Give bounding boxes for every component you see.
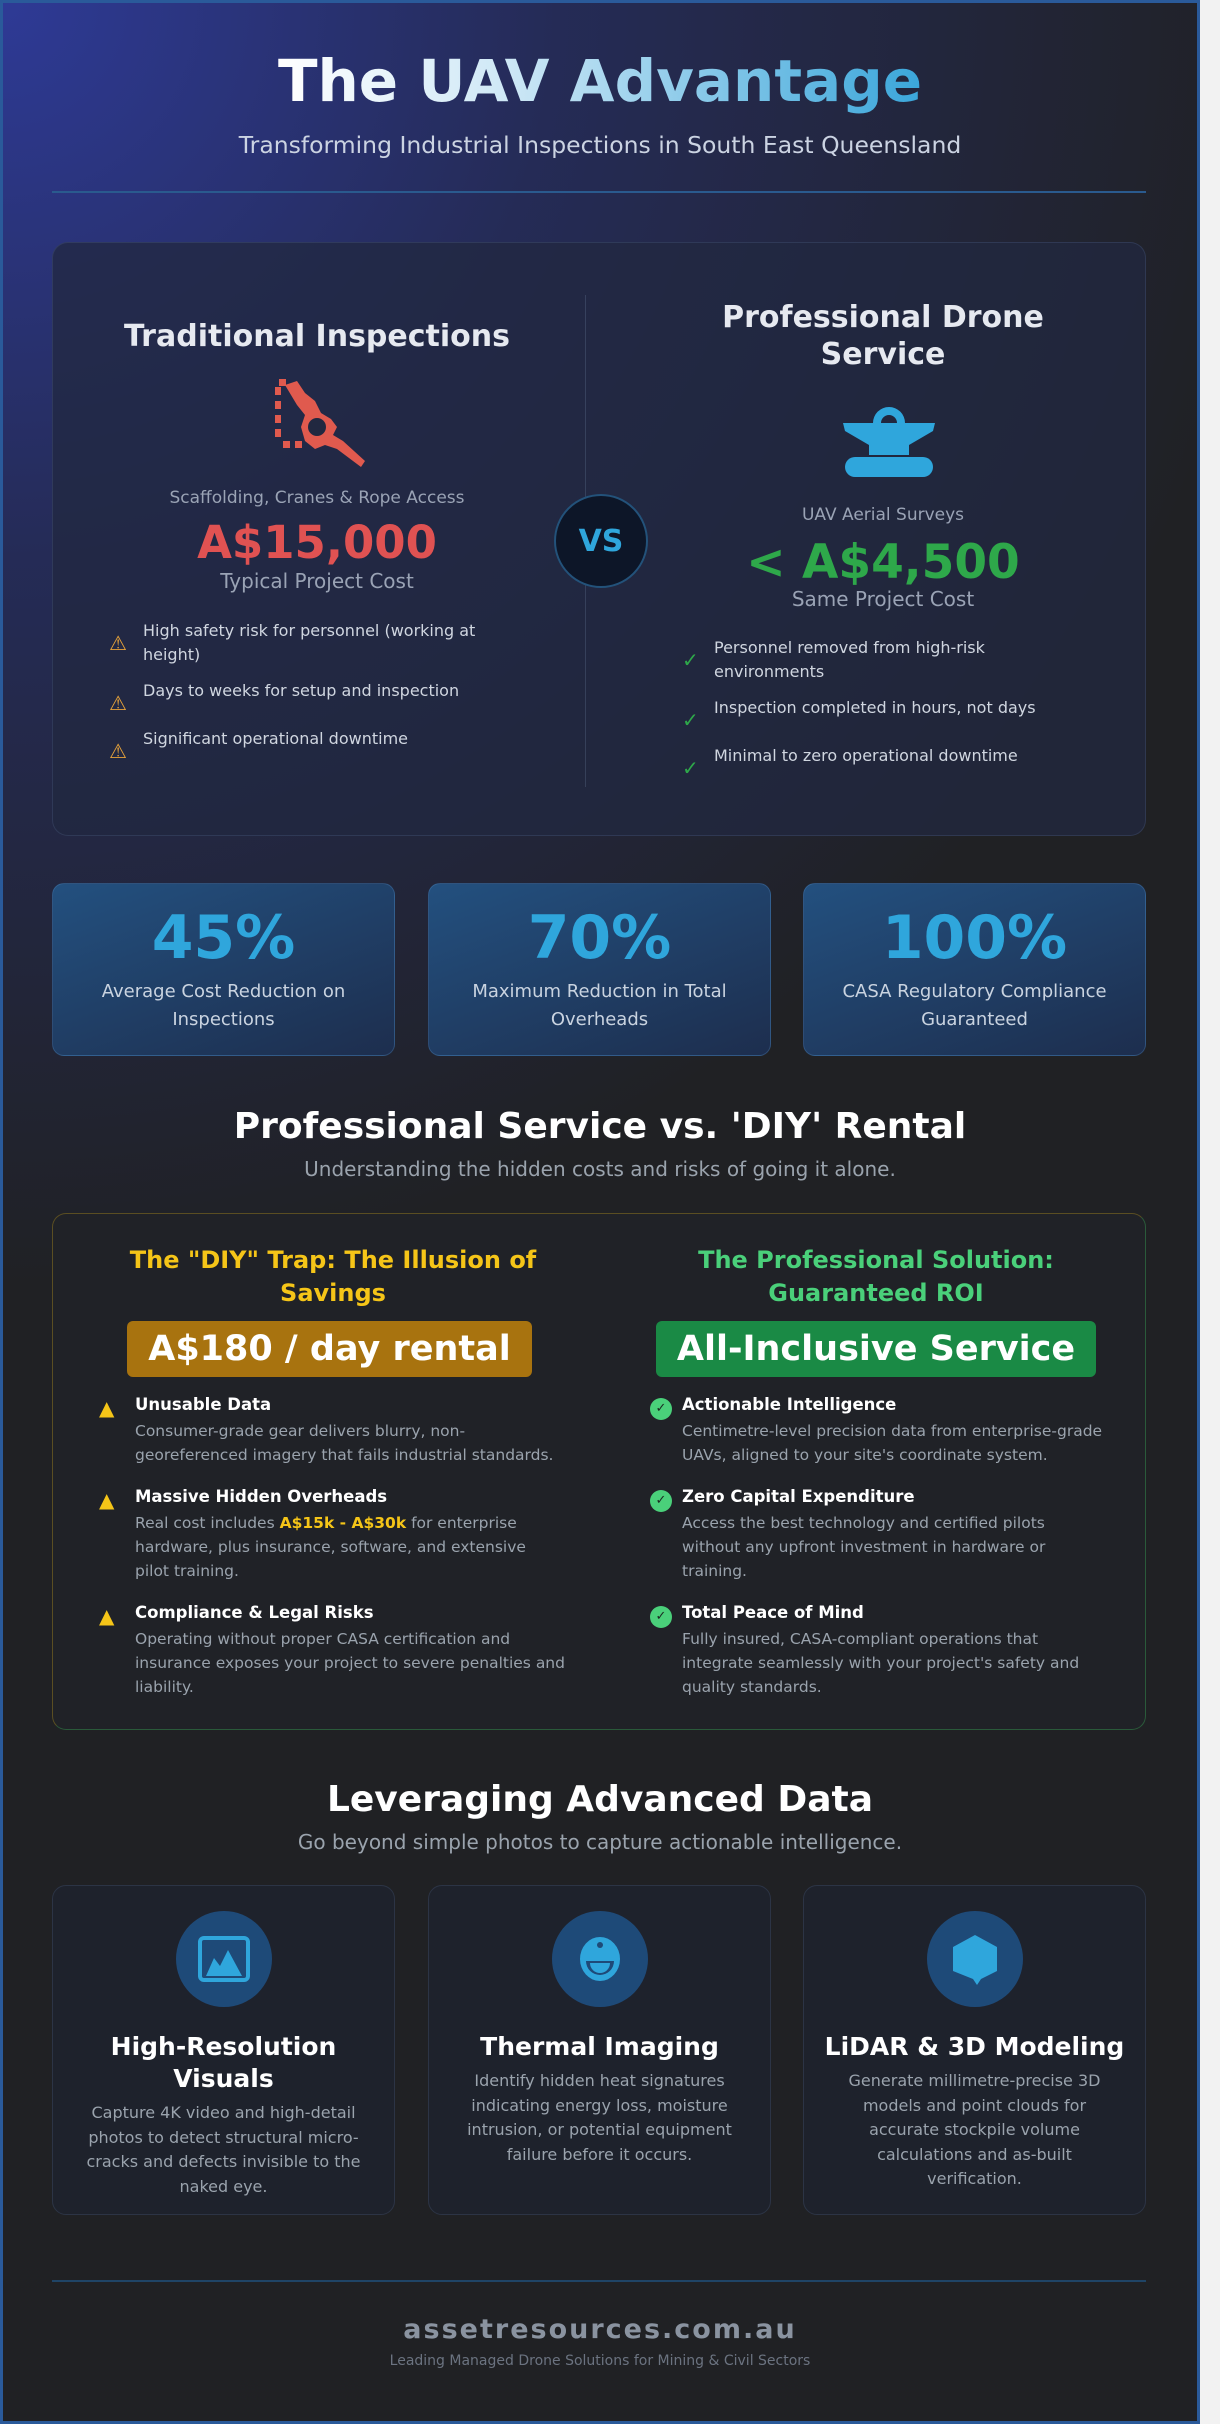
VS badge: VS [579, 524, 623, 558]
stat: 70%: Maximum Reduction in Total [472, 981, 727, 1002]
badge: rental [127, 1321, 532, 1377]
list: DIY risks [99, 1395, 553, 1464]
heading: professional solution: The Professional Solution: [698, 1246, 1054, 1274]
icon: 3d hexagon [926, 1911, 1022, 2007]
panel: DIY vs professional: ✓ [656, 1493, 666, 1508]
icon: scaffolding [275, 379, 365, 467]
panel: DIY vs professional: ▲ [99, 1396, 114, 1420]
card: high-res: Capture 4K video and high-detail photos to detect structural micro-cracks and defects invisible to the naked eye. [86, 2103, 361, 2196]
title: The UAV Advantage [278, 47, 922, 115]
list: traditional risks: ⚠ [109, 739, 127, 763]
text: Go beyond simple photos to capture actionable intelligence. [298, 1830, 902, 1854]
panel: DIY vs professional: ✓ [656, 1609, 666, 1624]
heading: professional solution: Guaranteed ROI [768, 1279, 984, 1307]
text: Understanding the hidden costs and risks of going it alone. [304, 1157, 896, 1181]
list: DIY risks: Consumer-grade gear delivers blurry, non-georeferenced imagery that fails industrial standards. [135, 1422, 553, 1464]
list: drone benefits: ✓ [682, 708, 699, 732]
stat: 100%: CASA Regulatory Compliance [842, 981, 1107, 1002]
panel: comparison: Same Project Cost [792, 587, 974, 611]
panel: DIY vs professional: Compliance & Legal Risks [135, 1603, 374, 1622]
footer: tagline: Leading Managed Drone Solutions for Mining & Civil Sectors [390, 2353, 810, 2369]
list: professional benefits: Centimetre-level precision data from enterprise-grade UAVs, aligned to your site's coordinate system. [682, 1422, 1102, 1464]
stat: 45%: Inspections [172, 1009, 275, 1030]
stat: 70% [428, 883, 771, 1056]
badge: all-inclusive: All-Inclusive Service [677, 1329, 1075, 1369]
panel: DIY vs professional: Operating without proper CASA certification and insurance exposes your project to severe penalties and liability. [135, 1630, 565, 1696]
list: professional benefits [650, 1395, 1102, 1464]
panel: DIY vs professional: Access the best technology and certified pilots without any upfront investment in hardware or training. [682, 1514, 1045, 1580]
subtitle: Transforming Industrial Inspections in South East Queensland [239, 131, 961, 159]
panel: DIY vs professional: ✓ [656, 1401, 666, 1416]
panel: comparison: Typical Project Cost [220, 569, 414, 593]
list: drone benefits: Inspection completed in hours, not days [714, 698, 1036, 717]
card: lidar: LiDAR & 3D Modeling [825, 2032, 1124, 2061]
card: high-res [52, 1885, 395, 2215]
panel: DIY vs professional: Total Peace of Mind [682, 1603, 864, 1622]
icon: thermal [552, 1911, 648, 2007]
panel: DIY vs professional: Real cost includes A$15k - A$30k for enterprise hardware, plus insurance, software, and extensive pilot training. [135, 1514, 526, 1580]
stat: 45%: 45% [152, 903, 295, 973]
badge: rental: A$180 / day rental [148, 1329, 511, 1369]
list: DIY risks: Unusable Data [135, 1395, 271, 1414]
card: thermal [428, 1885, 771, 2215]
card: thermal: Identify hidden heat signatures indicating energy loss, moisture intrusion, or potential equipment failure before it occurs. [467, 2071, 732, 2164]
price: traditional: A$15,000 [197, 516, 437, 569]
heading: traditional: Traditional Inspections [124, 319, 510, 354]
footer: website: assetresources.com.au [403, 2314, 797, 2345]
price: drone: < A$4,500 [746, 535, 1020, 590]
stat: 100%: 100% [882, 903, 1067, 973]
badge: all-inclusive [656, 1321, 1096, 1377]
list: traditional risks [109, 621, 475, 763]
panel: comparison: UAV Aerial Surveys [802, 505, 964, 525]
list: drone benefits: ✓ [682, 648, 699, 672]
stat: 70%: Overheads [551, 1009, 648, 1030]
stat: 100%: Guaranteed [921, 1009, 1028, 1030]
heading: DIY section: Professional Service vs. 'DIY' Rental [234, 1106, 966, 1147]
stat: 100% [803, 883, 1146, 1056]
heading: drone: Service [821, 337, 945, 372]
card: lidar [803, 1885, 1146, 2215]
list: traditional risks: ⚠ [109, 631, 127, 655]
stat: 45% [52, 883, 395, 1056]
icon: image [176, 1911, 272, 2007]
panel: DIY vs professional [52, 1213, 1146, 1730]
icon: drone [843, 407, 935, 477]
heading: advanced data: Leveraging Advanced Data [327, 1779, 873, 1820]
VS badge [554, 494, 648, 588]
card: lidar: Generate millimetre-precise 3D models and point clouds for accurate stockpile volume calculations and as-built verification. [849, 2071, 1100, 2188]
list: drone benefits [682, 638, 1036, 780]
heading: DIY trap: Savings [280, 1279, 386, 1307]
list: traditional risks: Significant operational downtime [143, 729, 408, 748]
list: drone benefits: Personnel removed from high-risk environments [714, 638, 985, 681]
heading: DIY trap [130, 1246, 536, 1307]
panel: DIY vs professional: ▲ [99, 1488, 114, 1512]
card: thermal: Thermal Imaging [480, 2032, 719, 2061]
list: drone benefits: Minimal to zero operational downtime [714, 746, 1018, 765]
stat: 70%: 70% [528, 903, 671, 973]
stat: 45%: Average Cost Reduction on [102, 981, 345, 1002]
panel: comparison [52, 242, 1146, 836]
list: traditional risks: ⚠ [109, 691, 127, 715]
list: professional benefits: Actionable Intelligence [682, 1395, 896, 1414]
heading: DIY trap: The "DIY" Trap: The Illusion of [130, 1246, 536, 1274]
panel: DIY vs professional: Fully insured, CASA-compliant operations that integrate seamlessly with your project's safety and quality standards. [682, 1630, 1079, 1696]
text: scaffolding label: Scaffolding, Cranes & Rope Access [169, 488, 464, 508]
heading: professional solution [698, 1246, 1054, 1307]
card: high-res: High-Resolution Visuals [111, 2032, 336, 2093]
heading: drone: Professional Drone [722, 300, 1044, 335]
list: traditional risks: Days to weeks for setup and inspection [143, 681, 459, 700]
heading: drone [722, 300, 1044, 372]
panel: DIY vs professional: Zero Capital Expenditure [682, 1487, 915, 1506]
panel: DIY vs professional: Massive Hidden Overheads [135, 1487, 387, 1506]
list: drone benefits: ✓ [682, 756, 699, 780]
list: traditional risks: High safety risk for personnel (working at height) [143, 621, 475, 664]
panel: DIY vs professional: ▲ [99, 1604, 114, 1628]
